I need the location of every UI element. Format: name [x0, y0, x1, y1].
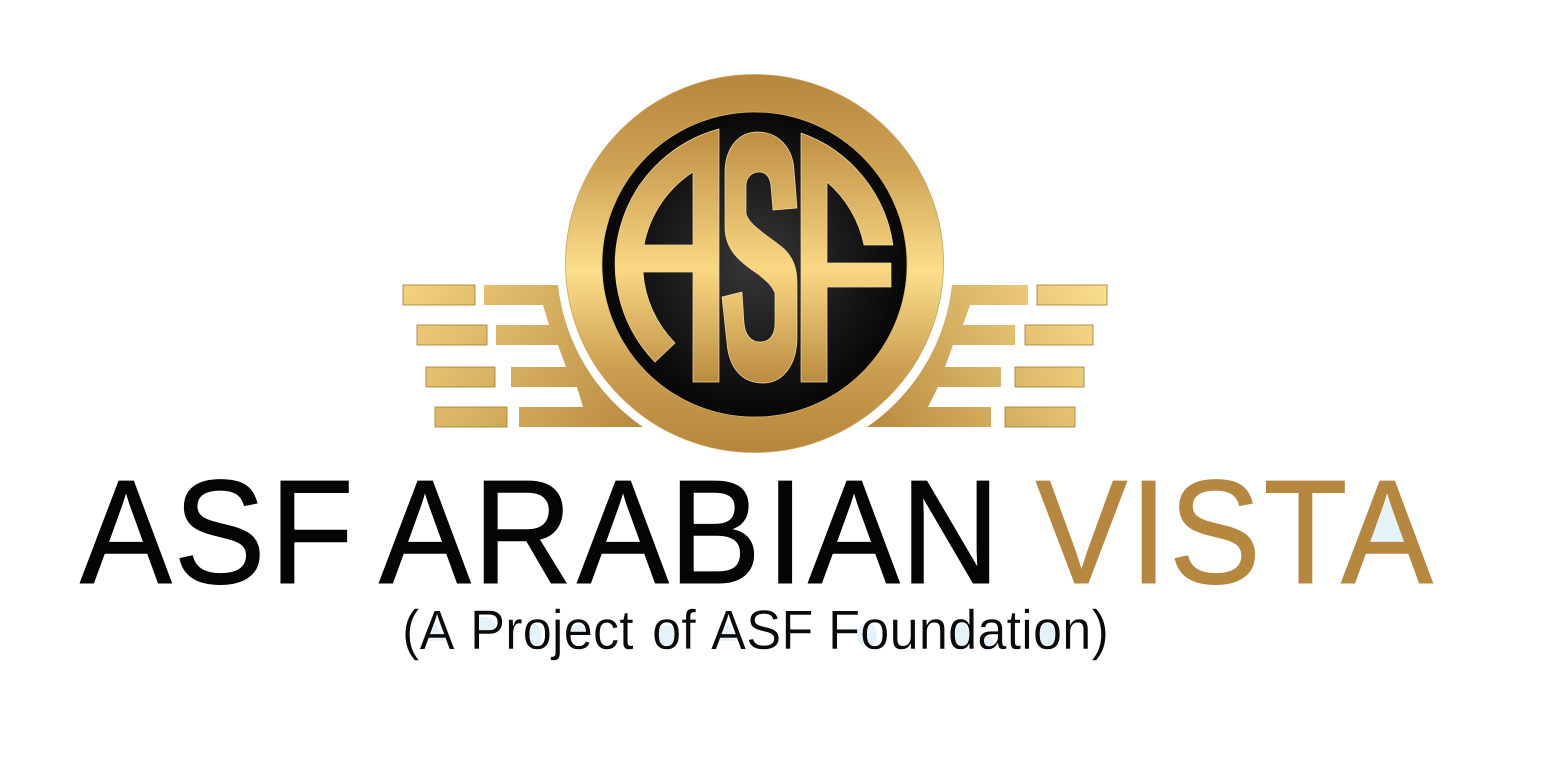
- icon: right wing: [867, 285, 1107, 427]
- emblem black disc: [602, 112, 907, 417]
- subtitle: Foundation): [828, 599, 1109, 661]
- title: ASF ARABIAN VISTA: [80, 450, 1434, 615]
- subtitle: of: [652, 599, 710, 661]
- subtitle: ASF: [711, 599, 828, 661]
- title gold part: VISTA: [1036, 450, 1434, 615]
- icon: ASF circular emblem: [566, 74, 944, 452]
- subtitle: Project: [470, 599, 648, 661]
- title black part: ASF ARABIAN: [80, 450, 1000, 615]
- emblem gold ring: [566, 74, 944, 452]
- subtitle: [402, 599, 1109, 661]
- icon: left wing: [403, 285, 643, 427]
- emblem letters ASF: [615, 129, 893, 383]
- subtitle: (A: [402, 599, 466, 661]
